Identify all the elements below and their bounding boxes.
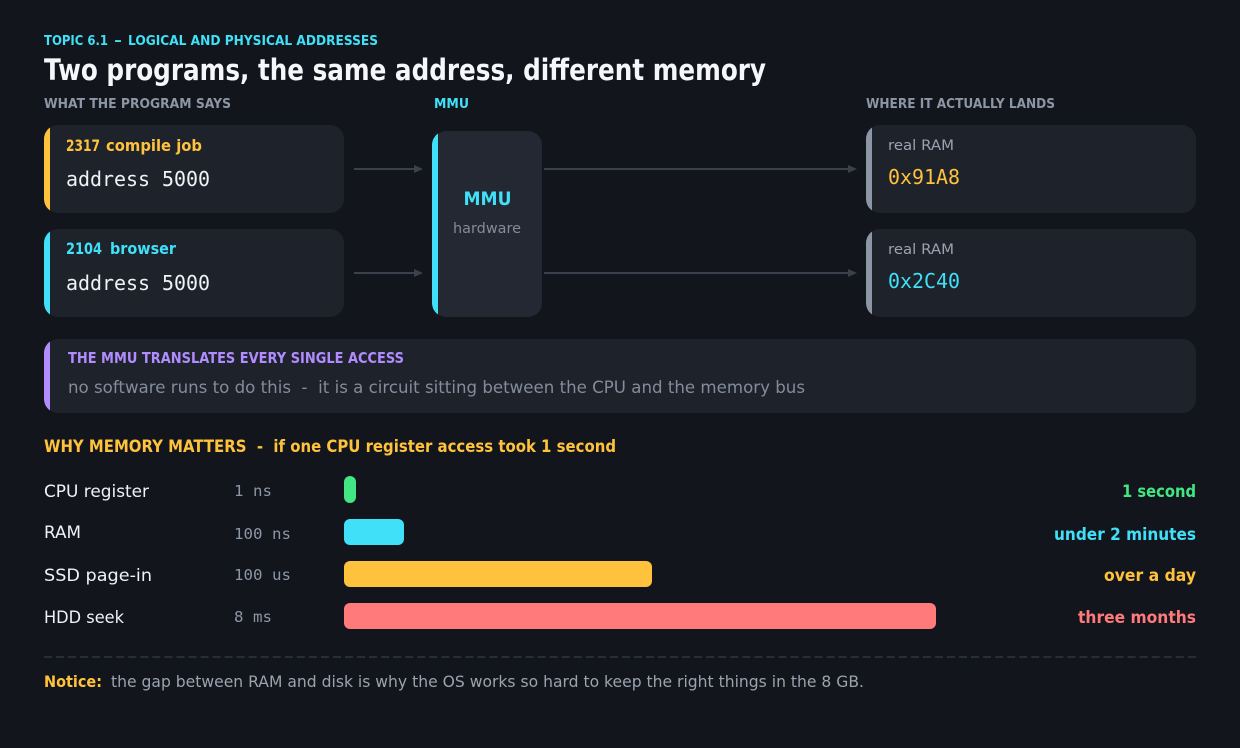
title: Two programs, the same address, different memory [44,53,766,87]
row: RAM: under 2 minutes [1054,525,1196,545]
row: RAM: 100 ns [234,525,291,543]
notice: Notice: [44,672,102,691]
row: HDD seek: three months [1078,608,1196,628]
topic label: - [114,33,122,49]
panel: real RAM 0x91A8: 0x91A8 [888,165,960,189]
panel: MMU hardware: hardware [453,221,521,237]
column heading: destination: WHERE IT ACTUALLY LANDS [866,96,1055,112]
column heading: MMU: MMU [434,96,469,112]
bar chart: memory latency [44,476,1196,629]
row: RAM: RAM [44,523,81,543]
row: HDD seek: 8 ms [234,608,272,626]
panel: real RAM 0x2C40: 0x2C40 [888,269,960,293]
row: CPU register: 1 ns [234,482,272,500]
column heading: program: WHAT THE PROGRAM SAYS [44,96,231,112]
panel: process 2104: browser [110,239,176,258]
row: SSD page-in: SSD page-in [44,566,152,586]
panel: process 2317 [44,125,344,213]
panel: process 2317: address 5000 [66,167,210,191]
row: SSD page-in [44,561,1196,587]
notice: the gap between RAM and disk is why the OS works so hard to keep the right things in the 8 GB. [111,672,864,691]
panel: real RAM 0x2C40: real RAM [888,242,954,258]
arrow: 2317 to MMU [354,165,423,173]
callout: MMU translates every access: THE MMU TRANSLATES EVERY SINGLE ACCESS [68,349,404,367]
row: HDD seek [44,603,1196,629]
panel: MMU hardware: MMU [464,188,512,210]
panel: process 2104: address 5000 [66,271,210,295]
panel: process 2317: 2317 [66,136,100,155]
panel: MMU hardware [432,131,542,317]
topic label [44,33,378,49]
arrow: MMU to 0x2C40 [544,269,857,277]
arrow: MMU to 0x91A8 [544,165,857,173]
section heading: why memory matters: WHY MEMORY MATTERS - if one CPU register access took 1 second [44,437,616,457]
callout: MMU translates every access [44,339,1196,413]
topic label: LOGICAL AND PHYSICAL ADDRESSES [128,33,378,49]
row: HDD seek: HDD seek [44,608,124,628]
panel: process 2104: 2104 [66,239,102,258]
row: SSD page-in: over a day [1104,566,1196,586]
callout: MMU translates every access: no software runs to do this - it is a circuit sitting between the CPU and the memory bus [68,378,805,398]
panel: process 2317: compile job [106,136,202,155]
arrow: 2104 to MMU [354,269,423,277]
row: CPU register [44,476,1196,503]
panel: process 2104 [44,229,344,317]
row: CPU register: 1 second [1122,482,1196,502]
topic label: TOPIC 6.1 [44,33,108,49]
row: RAM [44,519,1196,545]
panel: real RAM 0x91A8 [866,125,1196,213]
row: SSD page-in: 100 us [234,566,291,584]
row: CPU register: CPU register [44,482,149,502]
panel: real RAM 0x2C40 [866,229,1196,317]
panel: real RAM 0x91A8: real RAM [888,138,954,154]
